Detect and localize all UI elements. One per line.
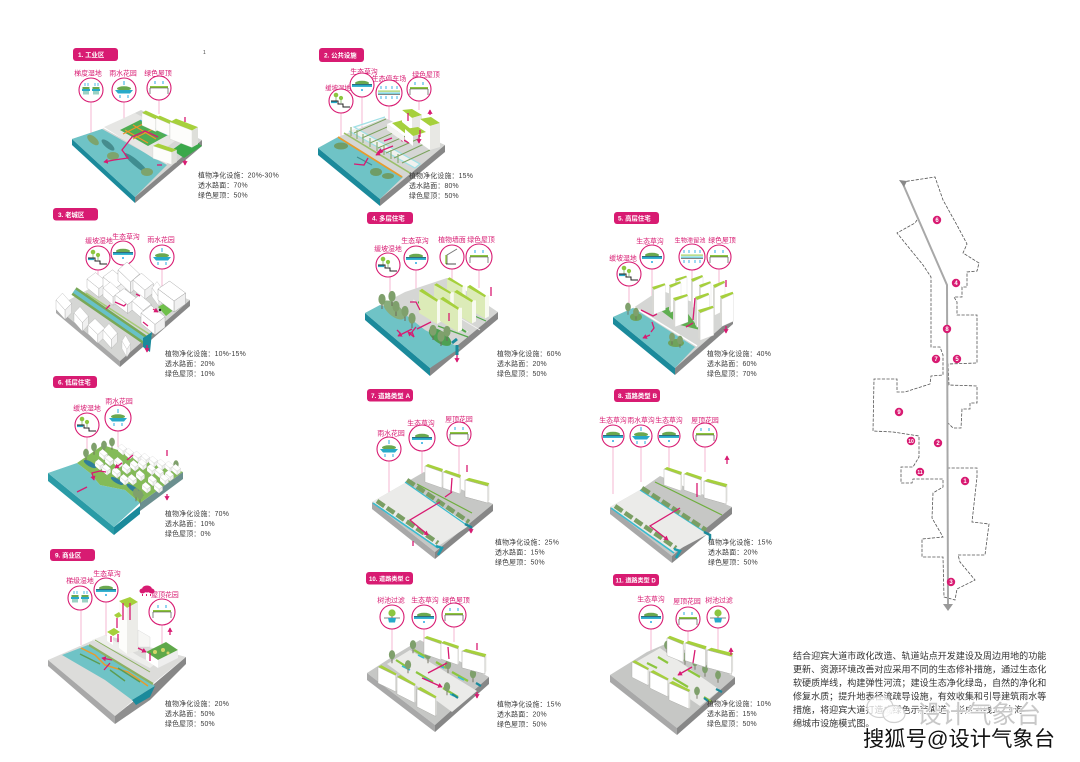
icon: swale 1 bbox=[602, 425, 624, 447]
statistics bbox=[165, 699, 229, 728]
heading: 6 low-rise: 6. 低层住宅 bbox=[58, 378, 91, 386]
icon: terrace wetland bbox=[68, 586, 92, 610]
icon: rain garden bbox=[150, 245, 174, 269]
bubble labels: 缓坡湿地 bbox=[325, 83, 351, 92]
statistics bbox=[708, 538, 772, 566]
bubble labels: 生态草沟 bbox=[655, 416, 683, 424]
bubble labels bbox=[85, 232, 175, 245]
statistics: 绿色屋顶：50% bbox=[495, 558, 545, 566]
icon: swale bbox=[404, 246, 428, 270]
statistics: 透水路面：15% bbox=[707, 709, 757, 718]
bubble labels: 屋顶花园 bbox=[445, 414, 473, 424]
rail line with arrows bbox=[899, 180, 953, 611]
statistics: 植物净化设施：60% bbox=[497, 349, 561, 358]
icon: swale bbox=[94, 578, 118, 602]
leader lines bbox=[390, 269, 479, 296]
icon: green wall bbox=[440, 245, 464, 269]
icon: swale bbox=[639, 605, 663, 629]
heading: 6 low-rise bbox=[53, 376, 97, 388]
bubble labels: 生态草沟 bbox=[407, 418, 435, 428]
bubble labels: 绿色屋顶 bbox=[467, 235, 495, 244]
bubble labels: 生态停车场 bbox=[372, 74, 406, 83]
zone markers bbox=[895, 216, 969, 586]
bubble labels: 雨水花园 bbox=[109, 68, 137, 78]
statistics: 透水路面：50% bbox=[165, 709, 215, 718]
heading: 5 high-rise bbox=[614, 212, 659, 224]
statistics: 透水路面：20% bbox=[497, 710, 547, 718]
statistics: 绿色屋顶：50% bbox=[707, 719, 757, 728]
icon: terrace wetland bbox=[79, 78, 103, 102]
icon: slope wetland bbox=[376, 253, 400, 277]
heading: 2 public: 2. 公共设施 bbox=[324, 50, 357, 60]
heading: 7 road A: 7. 道路类型 A bbox=[371, 391, 410, 400]
bubble labels bbox=[377, 596, 470, 604]
bubble labels: 屋顶花园 bbox=[673, 596, 701, 606]
description paragraph: 更新、资源环境改善对应采用不同的生态修补措施，通过生态化 bbox=[793, 664, 1046, 674]
bubble labels bbox=[374, 235, 495, 253]
zone markers: 2 bbox=[936, 441, 940, 447]
bubble labels: 生态草沟 bbox=[637, 594, 665, 604]
statistics: 透水路面：10% bbox=[165, 519, 215, 528]
zone markers: 8 bbox=[945, 327, 949, 333]
bubble labels: 生态草沟 bbox=[411, 596, 439, 604]
zone markers: 6 bbox=[935, 218, 939, 224]
icon: green roof bbox=[407, 77, 431, 101]
statistics: 透水路面：80% bbox=[409, 181, 459, 190]
description paragraph: 绵城市设施模式图。 bbox=[793, 718, 874, 728]
icon: slope wetland bbox=[86, 246, 110, 270]
bubble labels bbox=[609, 236, 736, 262]
icon: bioretention bbox=[679, 244, 705, 270]
heading: 8 road B: 8. 道路类型 B bbox=[618, 391, 657, 400]
icon: swale 3 bbox=[658, 425, 680, 447]
icon: green roof bbox=[466, 244, 492, 270]
heading: 1 industrial bbox=[73, 48, 118, 61]
heading: 4 mid-rise bbox=[367, 212, 413, 224]
statistics bbox=[707, 699, 771, 728]
isometric site bbox=[367, 636, 489, 732]
statistics: 绿色屋顶：50% bbox=[497, 720, 547, 728]
statistics: 植物净化设施：40% bbox=[707, 349, 771, 358]
heading: 1 industrial: 1. 工业区 bbox=[78, 50, 105, 59]
statistics: 植物净化设施：15% bbox=[497, 700, 561, 708]
statistics bbox=[497, 349, 561, 378]
heading: 3 old town bbox=[53, 208, 98, 220]
statistics: 透水路面：20% bbox=[708, 548, 758, 556]
icon: slope wetland bbox=[75, 413, 99, 437]
heading: 10 road C bbox=[366, 572, 413, 584]
heading: 7 road A bbox=[367, 389, 413, 402]
bubble labels: 生态草沟 bbox=[93, 569, 121, 578]
bubble labels: 屋顶花园 bbox=[151, 590, 179, 599]
leader lines bbox=[98, 265, 162, 302]
isometric site bbox=[318, 109, 445, 206]
heading: 9 commercial: 9. 商业区 bbox=[55, 550, 82, 560]
bubble labels bbox=[637, 594, 733, 606]
bubble labels: 雨水花园 bbox=[147, 235, 175, 244]
panel 3: old town bbox=[53, 208, 246, 378]
panel 5: high-rise housing bbox=[609, 212, 771, 378]
leader lines bbox=[392, 627, 454, 660]
statistics bbox=[495, 538, 559, 566]
description paragraph: 软硬质岸线，构建弹性河流；建设生态净化绿岛，自然的净化和 bbox=[793, 677, 1046, 688]
bubble labels: 缓坡湿地 bbox=[374, 244, 402, 253]
statistics: 透水路面：20% bbox=[165, 359, 215, 368]
bubble labels: 绿色屋顶 bbox=[708, 236, 736, 244]
bubble labels: 雨水花园 bbox=[105, 396, 133, 406]
description paragraph: 结合迎宾大道市政化改造、轨道站点开发建设及周边用地的功能 bbox=[793, 650, 1046, 661]
statistics: 绿色屋顶：50% bbox=[497, 369, 547, 378]
heading: 9 commercial bbox=[50, 549, 95, 561]
description paragraph: 修复水质；提升地表径流疏导设施，有效收集和引导建筑雨水等 bbox=[793, 690, 1046, 702]
zone markers: 9 bbox=[897, 410, 901, 416]
icon: tree filter bbox=[380, 605, 404, 629]
icon: rooftop garden bbox=[693, 423, 717, 447]
bubble labels bbox=[73, 396, 133, 412]
icon: slope wetland bbox=[329, 89, 353, 113]
leader lines bbox=[91, 100, 159, 134]
bubble labels: 生态草沟 bbox=[599, 416, 627, 424]
stray mark: 1 bbox=[203, 50, 206, 56]
statistics bbox=[497, 700, 561, 728]
bubble labels: 树池过滤 bbox=[705, 596, 733, 604]
statistics: 绿色屋顶：10% bbox=[165, 369, 215, 378]
icon: green roof bbox=[147, 76, 171, 100]
statistics: 植物净化设施：70% bbox=[165, 509, 229, 518]
isometric site bbox=[365, 277, 498, 376]
icon: rain garden bbox=[112, 78, 136, 102]
heading: 8 road B bbox=[614, 389, 660, 402]
statistics: 透水路面：15% bbox=[495, 548, 545, 556]
icon: green roof bbox=[707, 245, 731, 269]
bubble labels: 缓坡湿地 bbox=[609, 254, 637, 262]
bubble labels: 生态草沟 bbox=[636, 236, 664, 246]
panel 2: public facilities bbox=[318, 48, 473, 206]
isometric site bbox=[48, 597, 186, 724]
heading: 11 road D: 11. 道路类型 D bbox=[616, 576, 656, 584]
bubble labels: 绿色屋顶 bbox=[144, 68, 172, 78]
statistics: 植物净化设施：15% bbox=[409, 171, 473, 180]
statistics: 透水路面：60% bbox=[707, 359, 757, 368]
icon: tree filter bbox=[707, 606, 729, 628]
panel 4: mid-rise housing bbox=[365, 212, 561, 378]
zone markers: 7 bbox=[934, 357, 938, 363]
statistics: 透水路面：20% bbox=[497, 359, 547, 368]
panel 1: industrial district bbox=[72, 48, 279, 203]
bubble labels: 雨水花园 bbox=[377, 428, 405, 438]
statistics bbox=[165, 509, 229, 538]
bubble labels bbox=[599, 416, 719, 424]
bubble labels: 梯级湿地 bbox=[66, 576, 94, 585]
bubble labels: 绿色屋顶 bbox=[442, 596, 470, 604]
isometric site bbox=[613, 275, 734, 375]
leader lines bbox=[389, 446, 459, 507]
map boundary bbox=[873, 177, 989, 600]
isometric site bbox=[48, 438, 183, 535]
bubble labels: 生态草沟 bbox=[350, 67, 378, 76]
watermark: wechat icon and account bbox=[867, 696, 1041, 729]
statistics: 植物净化设施：25% bbox=[495, 538, 559, 546]
panel 8: road type B bbox=[599, 389, 772, 566]
description paragraph bbox=[793, 650, 1046, 728]
panel 11: road type D bbox=[610, 574, 771, 735]
statistics: 绿色屋顶：50% bbox=[409, 191, 459, 200]
bubble labels bbox=[66, 569, 179, 599]
bubble labels: 梯度湿地 bbox=[74, 68, 102, 78]
statistics: 绿色屋顶：50% bbox=[708, 558, 758, 566]
statistics: 绿色屋顶：50% bbox=[198, 190, 248, 200]
description paragraph: 措施，将迎宾大道打造成绿色示范廊道，形成沿线1-3个海 bbox=[793, 704, 1023, 715]
statistics bbox=[198, 170, 279, 200]
bubble labels bbox=[325, 67, 440, 92]
heading: 3 old town: 3. 老城区 bbox=[58, 210, 85, 219]
statistics: 透水路面：70% bbox=[198, 180, 248, 190]
bubble labels bbox=[377, 414, 473, 438]
leader lines bbox=[651, 628, 718, 672]
bubble labels: 植物墙面 bbox=[438, 235, 466, 244]
isometric site bbox=[610, 456, 732, 563]
statistics: 植物净化设施：10% bbox=[707, 699, 771, 708]
icon: rain garden bbox=[377, 437, 401, 461]
location map bbox=[873, 177, 989, 611]
icon: eco parking bbox=[376, 80, 402, 106]
panel 9: commercial district bbox=[48, 549, 229, 728]
zone markers: 4 bbox=[954, 281, 958, 287]
icon: rain cloud bbox=[140, 586, 154, 596]
statistics bbox=[409, 171, 473, 200]
leader lines bbox=[81, 602, 162, 645]
watermark: wechat icon and account: 设计气象台 bbox=[917, 701, 1041, 729]
statistics bbox=[707, 349, 771, 378]
icon: swale bbox=[640, 245, 664, 269]
statistics: 植物净化设施：10%-15% bbox=[165, 349, 246, 358]
bubble labels: 绿色屋顶 bbox=[412, 70, 440, 79]
bubble labels: 缓坡湿地 bbox=[85, 236, 113, 245]
panel 6: low-rise housing bbox=[48, 376, 229, 538]
icon: rain garden bbox=[105, 405, 131, 431]
icon: swale bbox=[412, 605, 436, 629]
isometric site bbox=[372, 464, 493, 559]
icon: rooftop garden bbox=[447, 422, 471, 446]
bubble labels: 雨水草沟 bbox=[627, 416, 655, 424]
zone markers: 3 bbox=[949, 580, 953, 586]
bubble labels: 生态草沟 bbox=[401, 236, 429, 245]
watermark: sohu account: 搜狐号@设计气象台 bbox=[863, 727, 1055, 751]
statistics: 植物净化设施：15% bbox=[708, 538, 772, 546]
icon: swale bbox=[350, 73, 374, 97]
zone markers: 10 bbox=[908, 439, 914, 445]
heading: 2 public bbox=[319, 48, 364, 62]
icon: swale bbox=[111, 241, 135, 265]
bubble labels bbox=[74, 68, 172, 78]
icon: swale 2 bbox=[630, 425, 652, 447]
icon: slope wetland bbox=[617, 262, 641, 286]
isometric site bbox=[72, 110, 202, 203]
statistics: 绿色屋顶：70% bbox=[707, 369, 757, 378]
bubble labels: 生态草沟 bbox=[112, 232, 140, 241]
icon: swale bbox=[409, 425, 435, 451]
icon: green roof bbox=[442, 603, 466, 627]
heading: 11 road D bbox=[613, 574, 659, 586]
statistics: 绿色屋顶：0% bbox=[165, 529, 211, 538]
statistics bbox=[165, 349, 246, 378]
icon: rooftop garden bbox=[149, 599, 175, 625]
bubble labels: 缓坡湿地 bbox=[73, 404, 101, 412]
bubble labels: 树池过滤 bbox=[377, 596, 405, 604]
heading: 10 road C: 10. 道路类型 C bbox=[369, 575, 410, 583]
zone markers: 5 bbox=[955, 357, 959, 363]
leader lines bbox=[341, 97, 419, 136]
zone markers: 1 bbox=[963, 479, 967, 485]
heading: 4 mid-rise: 4. 多层住宅 bbox=[372, 214, 405, 222]
bubble labels: 生物滞留池 bbox=[675, 236, 705, 244]
isometric site bbox=[56, 262, 190, 367]
heading: 5 high-rise: 5. 高层住宅 bbox=[618, 214, 651, 222]
panel 7: road type A bbox=[367, 389, 559, 566]
bubble labels: 屋顶花园 bbox=[691, 416, 719, 424]
statistics: 植物净化设施：20%-30% bbox=[198, 170, 279, 180]
statistics: 绿色屋顶：50% bbox=[165, 719, 215, 728]
leader lines bbox=[613, 447, 705, 494]
isometric site bbox=[610, 636, 735, 735]
leader lines bbox=[87, 431, 118, 455]
leader lines bbox=[629, 269, 719, 310]
statistics: 植物净化设施：20% bbox=[165, 699, 229, 708]
panel 10: road type C bbox=[366, 572, 561, 732]
zone markers: 11 bbox=[917, 470, 923, 476]
icon: rooftop garden bbox=[676, 607, 700, 631]
